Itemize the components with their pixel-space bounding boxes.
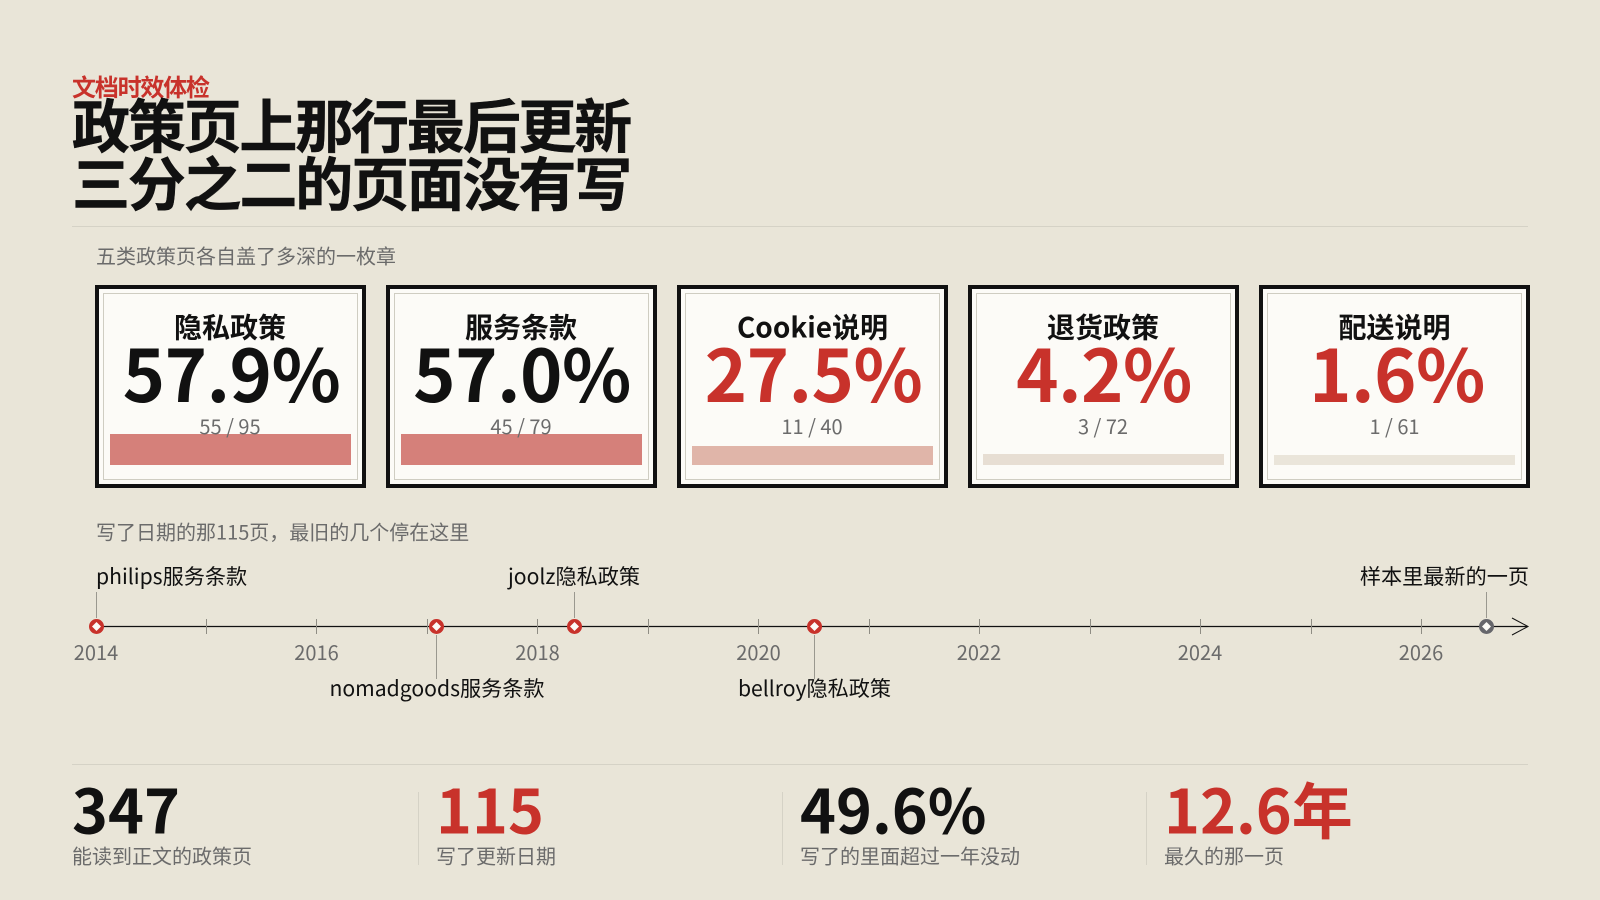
card: 服务条款: 57.0% xyxy=(413,318,631,423)
card: 服务条款: 45 / 79 xyxy=(490,411,552,440)
year labels: 2014 xyxy=(74,637,118,666)
year labels: 2018 xyxy=(515,637,560,666)
stat: 115 xyxy=(418,762,556,870)
card: Cookie说明: Cookie说明 xyxy=(737,306,888,346)
card: 服务条款: 服务条款 xyxy=(465,306,577,346)
event labels xyxy=(96,560,1529,703)
card: 配送说明: 1.6% xyxy=(1309,318,1485,423)
event labels: nomadgoods服务条款 xyxy=(329,672,545,703)
panel: stamp cards xyxy=(97,287,1528,486)
card: 退货政策 xyxy=(970,287,1237,486)
stat: 115: 写了更新日期 xyxy=(436,840,556,870)
section heading: cards: 五类政策页各自盖了多深的一枚章 xyxy=(96,240,396,270)
year labels: 2020 xyxy=(736,637,781,666)
section heading: timeline: 写了日期的那115页，最旧的几个停在这里 xyxy=(96,516,469,546)
card: 隐私政策: 57.9% xyxy=(123,318,340,423)
stats row xyxy=(72,762,1353,870)
stat: 347: 能读到正文的政策页 xyxy=(72,840,252,870)
year labels: 2026 xyxy=(1399,637,1443,666)
event labels: bellroy隐私政策 xyxy=(738,672,891,703)
stat: 49.6%: 写了的里面超过一年没动 xyxy=(800,840,1020,870)
card: 隐私政策: 55 / 95 xyxy=(199,411,261,440)
title: 三分之二的页面没有写 xyxy=(72,138,630,222)
stat: 12.6年: 最久的那一页 xyxy=(1164,840,1284,870)
year labels: 2016 xyxy=(294,637,339,666)
markers xyxy=(89,619,1494,634)
card: 配送说明: 1 / 61 xyxy=(1369,411,1420,440)
stat: 49.6%: 49.6% xyxy=(800,762,987,852)
stat: 347 xyxy=(72,762,252,870)
card: 服务条款 xyxy=(388,287,655,486)
year labels: 2022 xyxy=(957,637,1001,666)
kicker: 文档时效体检 xyxy=(72,68,210,103)
leader lines xyxy=(96,592,1486,679)
axis with arrow xyxy=(96,618,1528,635)
card: 退货政策: 3 / 72 xyxy=(1078,411,1128,440)
title xyxy=(72,80,631,222)
timeline chart xyxy=(74,560,1529,703)
event labels: joolz隐私政策 xyxy=(507,560,640,591)
card: 隐私政策: 隐私政策 xyxy=(174,306,286,346)
card: 退货政策: 4.2% xyxy=(1016,318,1192,423)
stat: 347: 347 xyxy=(72,762,180,852)
stat: 12.6年: 12.6年 xyxy=(1164,762,1353,852)
event labels: philips服务条款 xyxy=(96,560,247,591)
stat: 115: 115 xyxy=(436,762,544,852)
year labels xyxy=(74,637,1443,666)
title: 政策页上那行最后更新 xyxy=(72,80,631,164)
card: 隐私政策 xyxy=(97,287,364,486)
card: Cookie说明 xyxy=(679,287,946,486)
card: 配送说明 xyxy=(1261,287,1528,486)
year labels: 2024 xyxy=(1178,637,1222,666)
card: Cookie说明: 11 / 40 xyxy=(781,411,843,440)
card: 退货政策: 退货政策 xyxy=(1047,306,1159,346)
year ticks xyxy=(206,619,1422,634)
card: 配送说明: 配送说明 xyxy=(1338,306,1451,346)
event labels: 样本里最新的一页 xyxy=(1360,560,1529,591)
card: Cookie说明: 27.5% xyxy=(705,318,922,423)
stat: 49.6% xyxy=(782,762,1020,870)
